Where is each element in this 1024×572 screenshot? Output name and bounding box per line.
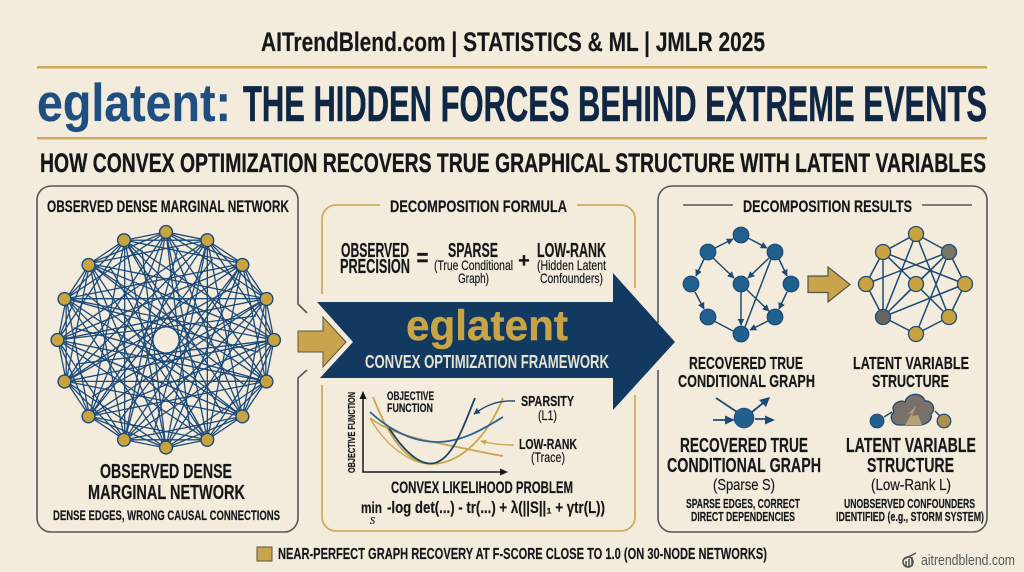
text: low-rank L description: STRUCTURE — [867, 455, 954, 477]
formula: Confounders) — [540, 270, 603, 286]
header: source line: AITrendBlend.com | STATISTICS & ML | JMLR 2025 — [261, 27, 765, 57]
column heading: recovered graph — [678, 353, 815, 391]
dense network graph — [0, 153, 353, 527]
objective function chart: (L1) — [538, 407, 557, 423]
text: sparse S description: RECOVERED TRUE — [680, 435, 808, 457]
panel caption: OBSERVED DENSE — [100, 461, 232, 483]
objective function chart: LOW-RANK — [519, 436, 577, 453]
objective function chart: (Trace) — [531, 449, 565, 465]
formula: = — [416, 245, 428, 272]
eglatent label: eglatent — [406, 302, 568, 350]
convex likelihood problem: CONVEX LIKELIHOOD PROBLEM — [391, 479, 573, 497]
text: sparse S description: (Sparse S) — [713, 477, 775, 494]
panel: decomposition results — [658, 186, 987, 532]
text: sparse S description: SPARSE EDGES, CORRECT — [686, 496, 800, 511]
panel: observed dense marginal network — [0, 153, 353, 532]
formula: OBSERVED — [341, 240, 409, 262]
formula: + — [518, 250, 530, 272]
convex likelihood problem: min — [361, 500, 382, 517]
objective function chart — [346, 391, 577, 476]
formula: PRECISION — [340, 256, 410, 278]
formula — [340, 240, 606, 286]
column heading: latent structure: STRUCTURE — [872, 371, 949, 391]
panel heading: OBSERVED DENSE MARGINAL NETWORK — [47, 197, 289, 216]
icon: storm cloud latent confounder — [870, 394, 951, 428]
text: sparse S description: DIRECT DEPENDENCIES — [691, 509, 795, 524]
panel heading: DECOMPOSITION FORMULA — [390, 197, 567, 216]
convex likelihood problem: S — [370, 516, 375, 527]
footer note: NEAR-PERFECT GRAPH RECOVERY AT F-SCORE CLOSE TO 1.0 (ON 30-NODE NETWORKS) — [278, 546, 767, 563]
arrow: network to framework — [298, 317, 346, 367]
panel caption: MARGINAL NETWORK — [88, 482, 245, 504]
framework label: CONVEX OPTIMIZATION FRAMEWORK — [365, 352, 609, 372]
objective function chart: OBJECTIVE FUNCTION — [346, 392, 358, 473]
formula: LOW-RANK — [537, 240, 606, 262]
panel heading: DECOMPOSITION RESULTS — [743, 197, 912, 216]
objective function chart: OBJECTIVE — [387, 391, 434, 403]
text: low-rank L description — [836, 435, 984, 524]
central navy arrow — [317, 273, 675, 410]
column heading: recovered graph: RECOVERED TRUE — [689, 353, 803, 373]
formula: SPARSE — [448, 240, 498, 262]
icon: direct dependencies node — [713, 397, 775, 428]
convex likelihood problem — [361, 479, 605, 527]
panel: decomposition formula — [322, 197, 635, 531]
column heading: recovered graph: CONDITIONAL GRAPH — [678, 371, 815, 391]
text: sparse S description — [667, 435, 821, 524]
objective function chart: FUNCTION — [387, 403, 433, 415]
objective function chart: SPARSITY — [521, 393, 574, 410]
footer note — [257, 546, 767, 563]
convex likelihood problem: -log det(...) - tr(...) + λ(||S||₁ + γtr(L)) — [387, 499, 605, 517]
arrow: sparse to latent — [808, 267, 850, 302]
panel caption: DENSE EDGES, WRONG CAUSAL CONNECTIONS — [53, 507, 280, 523]
panel caption — [53, 461, 280, 523]
column heading: latent structure: LATENT VARIABLE — [853, 353, 969, 373]
column heading: latent structure — [853, 353, 969, 391]
text: sparse S description: CONDITIONAL GRAPH — [667, 455, 821, 477]
formula: (Hidden Latent — [537, 257, 606, 273]
panel frame — [658, 186, 987, 532]
text: low-rank L description: (Low-Rank L) — [871, 477, 951, 494]
latent variable graph — [858, 226, 972, 342]
formula: Graph) — [458, 270, 489, 286]
recovered sparse graph — [683, 227, 799, 342]
gold frame — [322, 205, 635, 531]
panel frame — [37, 186, 307, 532]
title: eglatent: — [37, 74, 231, 133]
formula: (True Conditional — [434, 257, 513, 273]
